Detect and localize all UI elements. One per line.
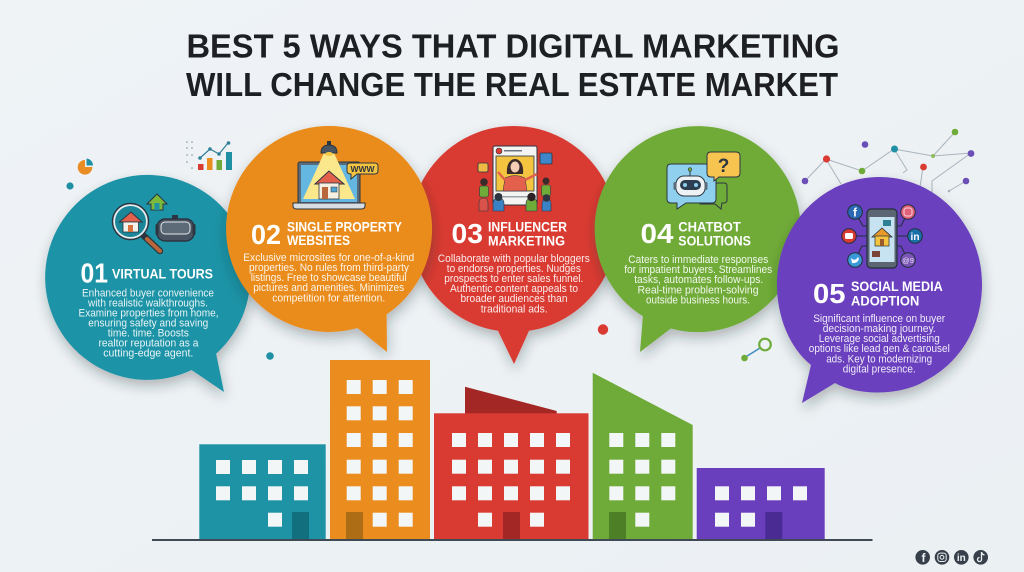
heading: single property websites (287, 219, 403, 248)
heading: virtual tours: VIRTUAL TOURS (112, 266, 213, 282)
body text 01: realtor reputation as a (98, 338, 198, 350)
icon: laptop with spotlight and house: WWW (350, 165, 375, 174)
body text 04: for impatient buyers. Streamlines (624, 264, 773, 276)
panel: 02 single property websites (226, 126, 432, 352)
building: teal (199, 444, 326, 540)
building: red (434, 387, 588, 540)
body text 02: pictures and amenities. Minimizes (253, 282, 405, 294)
speech bubble: green (595, 126, 801, 352)
body text 04: Caters to immediate responses (628, 254, 769, 266)
number 03: 03 (452, 218, 483, 249)
body text 03: Collaborate with popular bloggers (438, 253, 590, 265)
body text 03: broader audiences than (460, 293, 568, 305)
number 02: 02 (251, 219, 281, 250)
body text 01: with realistic walkthroughs. (87, 298, 208, 310)
heading: social media adoption (851, 278, 943, 308)
body text 05: digital presence. (843, 364, 916, 376)
title: BEST 5 WAYS THAT DIGITAL MARKETING (186, 28, 840, 66)
body text 04: outside business hours. (646, 294, 750, 306)
body text 02: competition for attention. (272, 292, 385, 304)
body text 03: to endorse properties. Nudges (447, 263, 581, 275)
heading: influencer marketing (488, 219, 567, 249)
body text 02: properties. No rules from third-party (249, 262, 410, 274)
title (186, 28, 840, 104)
decoration: red dot (598, 324, 608, 335)
illustration: city skyline (152, 360, 872, 541)
body text 04: Real-time problem-solving (638, 284, 758, 296)
decoration: network graph (802, 129, 974, 192)
body text 01: Enhanced buyer convenience (82, 288, 214, 300)
body text 05: ads. Key to modernizing (826, 354, 932, 366)
heading: chatbot solutions (678, 219, 751, 249)
heading: chatbot solutions: CHATBOT (678, 219, 741, 235)
footer: social media icons (915, 550, 988, 565)
heading: influencer marketing: INFLUENCER (488, 219, 567, 235)
panel: 01 virtual tours (45, 175, 250, 392)
body text 01: time. time. Boosts (108, 328, 189, 340)
title: WILL CHANGE THE REAL ESTATE MARKET (186, 67, 838, 104)
icon: phone with social network badges: @9 (902, 256, 914, 265)
speech bubble: red (410, 126, 617, 364)
body text 01 (78, 288, 218, 360)
icon: chatbot and speech bubbles: ? (718, 156, 729, 177)
body text 05: Significant influence on buyer (813, 313, 946, 325)
icon: influencer post and followers (478, 146, 552, 211)
body text 01: cutting-edge agent. (103, 348, 193, 360)
panel: 05 social media adoption (777, 177, 982, 403)
icon: tiktok (973, 550, 988, 565)
building: green (593, 373, 693, 540)
building: orange (330, 360, 430, 540)
speech bubble: teal (45, 175, 250, 392)
body text 03: Authentic content appeals to (450, 283, 578, 295)
heading: influencer marketing: MARKETING (488, 233, 565, 249)
icon: magnifier, house and VR headset (112, 194, 196, 251)
icon: phone with social network badges: in (911, 232, 919, 243)
decoration: green link node (741, 339, 771, 361)
speech bubble: orange (226, 126, 432, 352)
body text 01: Examine properties from home, (78, 308, 218, 320)
body text 02 (243, 252, 414, 304)
body text 05: decision-making journey. (823, 323, 936, 335)
number 05: 05 (813, 278, 846, 309)
body text 03: prospects to enter sales funnel. (444, 273, 583, 285)
icon: pie chart decoration (78, 158, 93, 175)
speech bubble: purple (777, 177, 982, 403)
building: purple (697, 468, 825, 540)
heading: single property websites: SINGLE PROPERTY (287, 219, 403, 235)
body text 05: Leverage social advertising (819, 333, 940, 345)
number 04: 04 (640, 218, 674, 249)
heading: chatbot solutions: SOLUTIONS (678, 233, 751, 249)
panel: 04 chatbot solutions (595, 126, 801, 352)
body text 02: Exclusive microsites for one-of-a-kind (243, 252, 414, 264)
icon: laptop with spotlight and house (293, 141, 378, 209)
number 01: 01 (80, 258, 108, 288)
body text 04 (624, 254, 773, 306)
body text 03 (438, 253, 590, 316)
body text 03: traditional ads. (481, 304, 548, 316)
heading: social media adoption: SOCIAL MEDIA (851, 278, 943, 294)
body text 05: options like lead gen & carousel (809, 343, 950, 355)
ground line (152, 539, 872, 541)
body text 04: tasks, automates follow-ups. (634, 274, 763, 286)
decoration: teal dot centre (266, 352, 274, 360)
body text 05 (809, 313, 950, 376)
icon: instagram (935, 550, 949, 565)
icon: small growth chart (186, 141, 232, 170)
icon: phone with social network badges (842, 205, 922, 268)
body text 02: listings. Free to showcase beautiful (251, 272, 407, 284)
heading: single property websites: WEBSITES (287, 232, 350, 248)
icon: linkedin: in (957, 553, 966, 564)
heading: social media adoption: ADOPTION (851, 292, 919, 308)
body text 01: ensuring safety and saving (88, 318, 208, 330)
panel: 03 influencer marketing (410, 126, 617, 364)
icon: phone with social network badges: f (853, 206, 858, 220)
icon: facebook: f (922, 551, 926, 565)
icon: chatbot and speech bubbles (667, 152, 740, 209)
decoration: teal dot left (66, 182, 74, 190)
